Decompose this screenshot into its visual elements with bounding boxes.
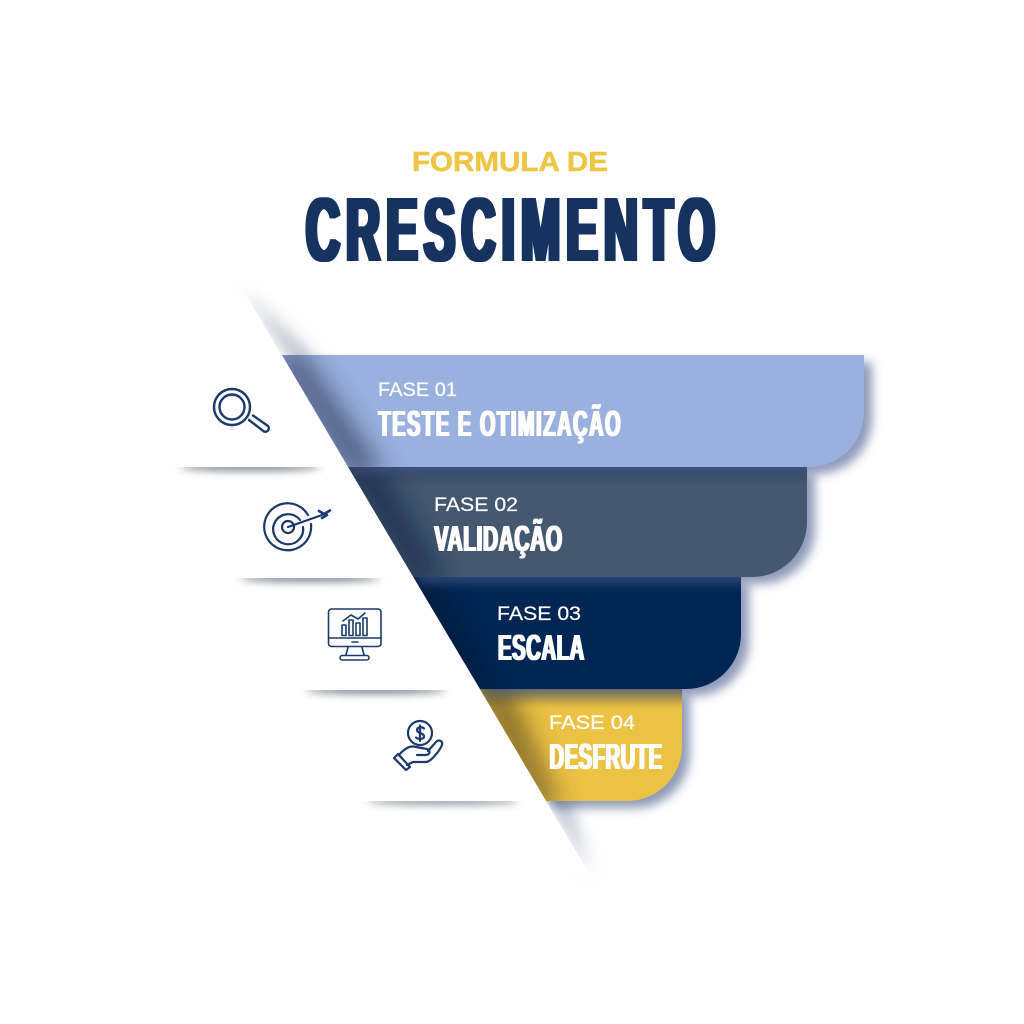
icon: target with arrow — [264, 503, 330, 550]
step shadow 3 — [306, 686, 446, 694]
step shadow 1 — [180, 463, 320, 471]
icon: hand holding coin — [394, 721, 442, 770]
step shadow 2 — [240, 574, 380, 582]
triangle edge shadow — [243, 290, 590, 875]
title: Formula de: FORMULA DE — [412, 146, 608, 177]
label: fase 04: FASE 04 — [549, 713, 635, 734]
funnel diagram — [150, 290, 872, 875]
panel: phase 02 bar — [348, 467, 807, 577]
label: escala: ESCALA — [498, 629, 584, 669]
panel: phase 04 bar — [480, 689, 682, 801]
bar 3 shadow — [421, 584, 749, 696]
label: fase 01: FASE 01 — [378, 380, 457, 401]
title: Crescimento: CRESCIMENTO — [306, 180, 715, 281]
panel: phase 01 bar — [282, 355, 864, 467]
bar 2 shadow — [356, 474, 815, 584]
bar 1 shadow — [290, 362, 872, 474]
label: fase 02: FASE 02 — [434, 495, 518, 516]
label: validação: VALIDAÇÃO — [434, 518, 562, 560]
step shadow 4 — [367, 797, 519, 805]
bar 4 shadow — [488, 696, 690, 808]
icon: magnifying glass — [214, 389, 269, 432]
icon: monitor with chart — [328, 609, 381, 660]
panel: phase 03 bar — [413, 577, 741, 689]
label: teste e otimização: TESTE E OTIMIZAÇÃO — [378, 403, 621, 445]
label: desfrute: DESFRUTE — [550, 738, 662, 778]
white triangle panel — [150, 290, 590, 875]
label: fase 03: FASE 03 — [497, 604, 581, 625]
